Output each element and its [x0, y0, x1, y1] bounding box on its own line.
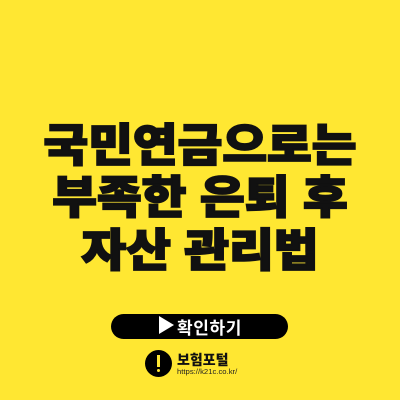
title [44, 109, 356, 279]
title: 국민연금으로는 [44, 109, 356, 174]
button label: 확인하기 [177, 314, 242, 339]
title: 자산 관리법 [81, 214, 319, 279]
brand url: https://k21c.co.kr/ [177, 367, 237, 376]
title: 부족한 은퇴 후 [52, 161, 348, 226]
button: 확인하기 [111, 314, 288, 339]
brand name: 보험포털 [177, 350, 229, 370]
icon: play triangle [159, 316, 174, 334]
icon: exclamation circle [145, 350, 172, 377]
